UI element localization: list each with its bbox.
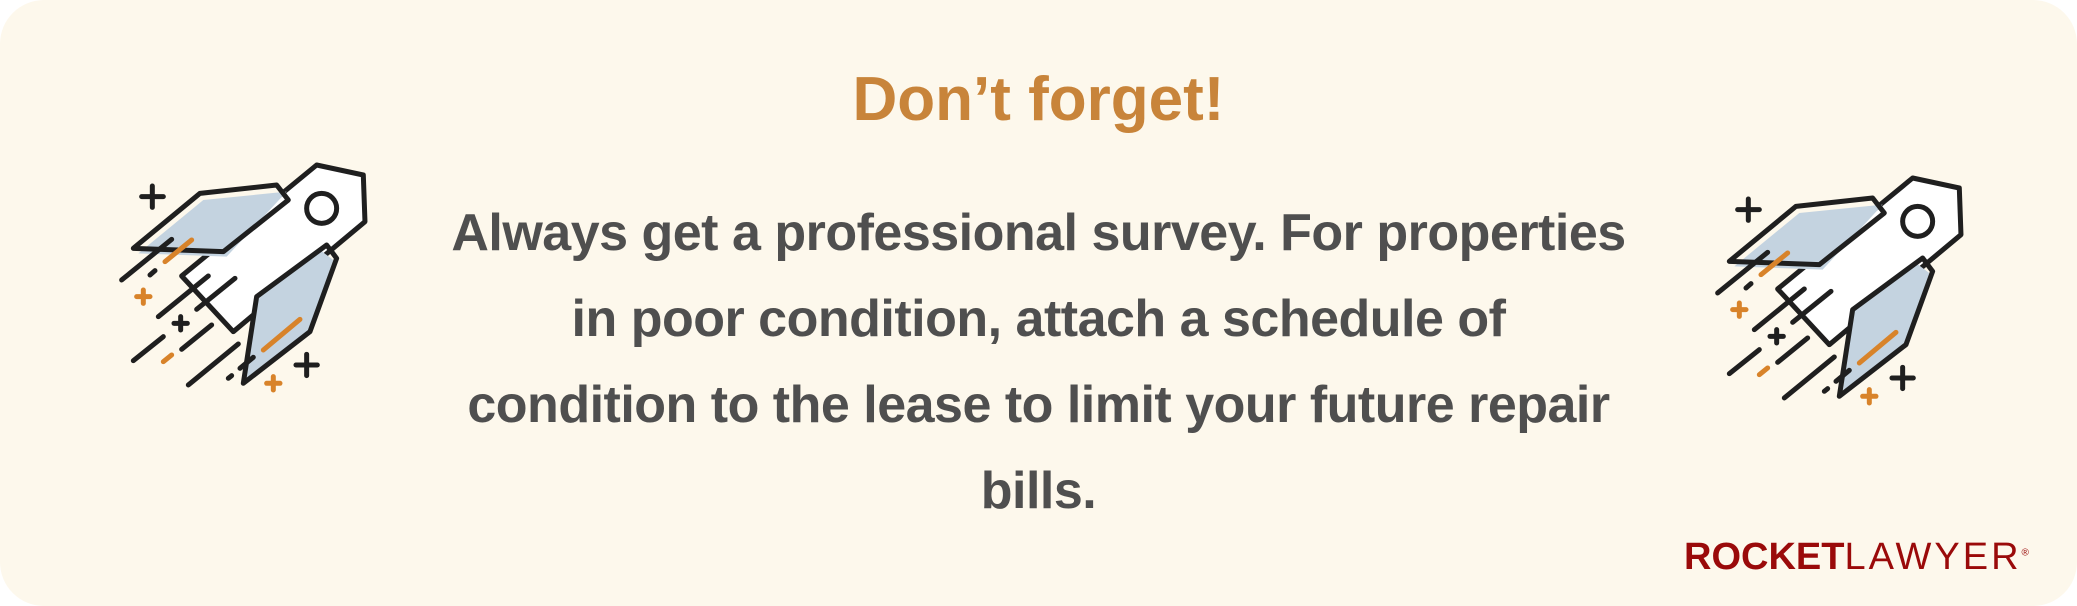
body text: condition to the lease to limit your future repair bbox=[467, 376, 1610, 434]
body text: Always get a professional survey. For properties bbox=[451, 204, 1626, 262]
body text: bills. bbox=[981, 462, 1096, 520]
body text bbox=[451, 204, 1626, 520]
icon: right rocket bbox=[1718, 178, 1961, 403]
logo: Rocket Lawyer: ROCKETLAWYER® bbox=[1684, 536, 2029, 578]
icon: left rocket bbox=[122, 165, 365, 390]
body text: in poor condition, attach a schedule of bbox=[572, 290, 1505, 348]
title: Don’t forget! bbox=[853, 65, 1224, 134]
